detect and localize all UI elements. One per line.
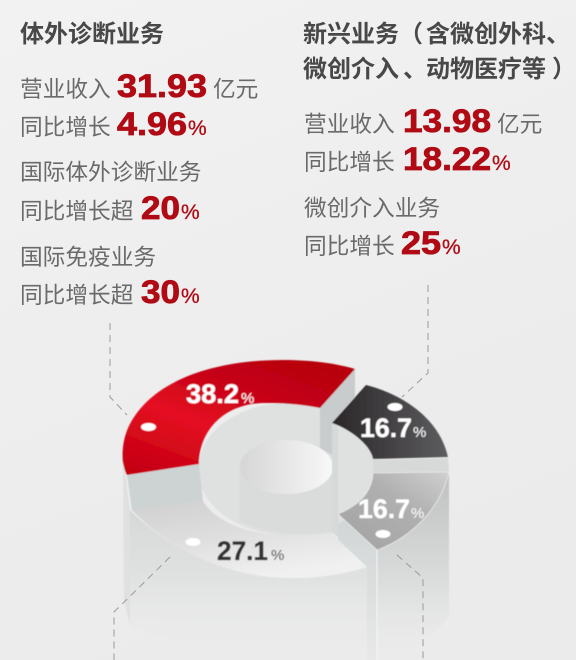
white edge line — [376, 550, 378, 660]
minimally invasive intervention row: % — [442, 236, 461, 259]
central ring floor — [198, 403, 378, 535]
growth row — [20, 106, 207, 142]
dashed leader lines — [110, 285, 428, 660]
3D donut chart — [123, 360, 449, 660]
segment: 38.2% red — [123, 360, 355, 475]
international immunoassay row — [20, 244, 200, 310]
left cut face — [127, 464, 203, 510]
international immunoassay row: % — [181, 285, 200, 308]
minimally invasive intervention row: 25 — [401, 225, 441, 261]
right heading: 、 — [403, 56, 427, 83]
left heading: 体外诊断业务 — [20, 21, 164, 48]
segment: 27.1% light: 27.1 — [217, 536, 268, 566]
revenue row: 营业收入 — [20, 76, 111, 102]
segment: 16.7% grey: % — [411, 505, 424, 522]
segment: 16.7% grey — [338, 472, 449, 550]
right heading: 动物医疗等 — [426, 56, 546, 83]
right heading: 含微创外科、 — [426, 21, 570, 48]
growth row: 18.22 — [403, 141, 491, 177]
international IVD row: 国际体外诊断业务 — [20, 159, 202, 185]
revenue row: 营业收入 — [304, 111, 395, 137]
right heading: 新兴业务（ — [303, 21, 423, 48]
revenue row: 亿元 — [213, 76, 258, 102]
international IVD row: 同比增长超 — [20, 198, 133, 224]
international IVD row — [20, 159, 202, 226]
growth row: 4.96 — [117, 106, 187, 142]
right heading — [303, 21, 576, 83]
minimally invasive intervention row: 微创介入业务 — [304, 195, 440, 221]
revenue row — [20, 68, 258, 104]
centre column wall — [240, 467, 333, 535]
left panel: 体外诊断业务 — [20, 21, 258, 310]
revenue row — [304, 103, 542, 139]
left outer wall — [123, 455, 130, 625]
minimally invasive intervention row — [304, 195, 461, 261]
right panel: 新兴业务 — [303, 21, 576, 261]
segment: 16.7% black: % — [413, 424, 426, 441]
growth row: 同比增长 — [20, 114, 111, 140]
segment: 27.1% light — [132, 501, 367, 578]
revenue row: 13.98 — [403, 103, 491, 139]
segment: 27.1% light: % — [271, 547, 284, 564]
international IVD row: % — [181, 201, 200, 224]
international IVD row: 20 — [141, 190, 180, 226]
revenue row: 亿元 — [497, 111, 542, 137]
segment: 38.2% red: % — [241, 390, 254, 407]
growth row: % — [188, 117, 207, 140]
segment: 16.7% black — [332, 385, 448, 459]
centre hole — [240, 440, 333, 494]
right cut face of red segment — [320, 369, 355, 455]
right heading: 微创介入 — [303, 56, 399, 83]
right heading: ） — [552, 56, 576, 83]
growth row: 同比增长 — [304, 149, 395, 175]
international immunoassay row: 同比增长超 — [20, 282, 133, 308]
segment: 16.7% black: 16.7 — [360, 413, 412, 443]
international immunoassay row: 30 — [141, 274, 180, 310]
growth row: % — [492, 152, 511, 175]
inner wall of the grey segment — [338, 514, 377, 660]
connector strip — [332, 423, 338, 537]
segment: 38.2% red: 38.2 — [186, 379, 239, 409]
grey band between segments — [373, 458, 449, 473]
segment: 16.7% grey: 16.7 — [358, 494, 410, 524]
revenue row: 31.93 — [117, 68, 207, 104]
right outer wall of the grey segment — [377, 472, 449, 660]
minimally invasive intervention row: 同比增长 — [304, 233, 395, 259]
lower body under the light segment — [130, 510, 367, 652]
growth row — [304, 141, 511, 177]
international immunoassay row: 国际免疫业务 — [20, 244, 156, 270]
